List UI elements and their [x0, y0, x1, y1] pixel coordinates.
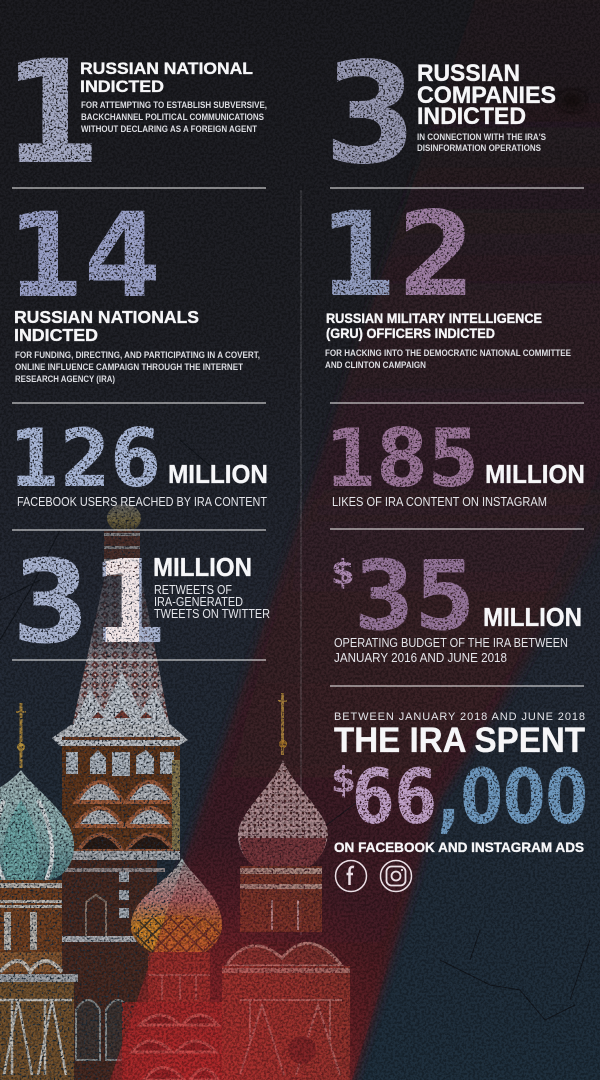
stat: IRA spent $66,000: $ [331, 760, 356, 801]
stat: 3 Russian companies [324, 33, 556, 196]
stat: 3 Russian companies: IN CONNECTION WITH THE IRA'S [417, 132, 546, 143]
stat: 12 GRU officers: (GRU) OFFICERS INDICTED [326, 325, 495, 341]
stat: 12 GRU officers: 12 [319, 186, 475, 323]
stat: 3 Russian companies: COMPANIES [417, 82, 556, 109]
stat: $35 million [331, 540, 582, 665]
stat: 14 Russian nationals: FOR FUNDING, DIRECTING, AND PARTICIPATING IN A COVERT, [15, 350, 260, 361]
stat: 14 Russian nationals: INDICTED [14, 325, 98, 345]
stat: 3 Russian companies: 3 [324, 33, 417, 196]
stat: 31 million: 31 [12, 536, 168, 670]
stat: 14 Russian nationals: ONLINE INFLUENCE CAMPAIGN THROUGH THE INTERNET [15, 362, 243, 373]
divider lines row 3 [12, 529, 584, 530]
divider lines row 2 [12, 402, 584, 404]
illustration: Saint Basil's Cathedral [0, 504, 350, 1080]
stat: 1 Russian national: FOR ATTEMPTING TO ESTABLISH SUBVERSIVE, [81, 100, 267, 111]
stat: 31 million: MILLION [153, 552, 252, 582]
stat: $35 million: 35 [354, 540, 475, 652]
stat: 31 million [20, 556, 270, 644]
divider lines [12, 660, 584, 686]
stat: 3 Russian companies: RUSSIAN [417, 60, 520, 87]
stat: 1 Russian national: RUSSIAN NATIONAL [80, 59, 253, 78]
stat: 31 million: IRA-GENERATED [154, 595, 243, 609]
right dome [222, 693, 350, 1080]
left dome [0, 703, 78, 1080]
stat: 126 million: FACEBOOK USERS REACHED BY IRA CONTENT [17, 495, 267, 509]
stat: 185 million: MILLION [485, 459, 585, 489]
stat: 31 million: 31 [12, 536, 168, 670]
icon: Facebook [336, 860, 366, 892]
stat: 126 million [9, 412, 268, 509]
divider lines row 1 [12, 187, 584, 189]
stat: $35 million: JANUARY 2016 AND JUNE 2018 [334, 651, 507, 665]
stat: 1 Russian national: BACKCHANNEL POLITICAL COMMUNICATIONS [81, 112, 264, 123]
stat: 185 million: 185 [325, 412, 479, 505]
stat: 1 Russian national: WITHOUT DECLARING AS A FOREIGN AGENT [81, 124, 257, 135]
red band overlay [110, 88, 589, 1080]
stat: 1 Russian national: 1 [2, 29, 102, 196]
central tower [52, 504, 188, 1080]
stat: 31 million: TWEETS ON TWITTER [154, 607, 270, 621]
stat: 12 GRU officers: AND CLINTON CAMPAIGN [325, 360, 426, 371]
stat: IRA spent $66,000: ON FACEBOOK AND INSTAGRAM ADS [334, 840, 584, 855]
stat: 1 Russian national: INDICTED [80, 77, 164, 96]
stat: 3 Russian companies: INDICTED [417, 103, 526, 130]
stat: 12 GRU officers [319, 186, 571, 371]
icon: Instagram [380, 860, 412, 892]
stat: IRA spent $66,000: THE IRA SPENT [334, 721, 585, 760]
stat: 14 Russian nationals [7, 187, 260, 385]
stat: 185 million: LIKES OF IRA CONTENT ON INSTAGRAM [332, 495, 547, 509]
stat: $35 million: $ [331, 553, 355, 593]
stat: 12 GRU officers: RUSSIAN MILITARY INTELLIGENCE [326, 310, 542, 326]
tower arches [76, 782, 174, 851]
stat: 14 Russian nationals: 14 [7, 187, 161, 324]
stat: IRA spent $66,000: BETWEEN JANUARY 2018 AND JUNE 2018 [334, 711, 585, 723]
stat: 126 million: 126 [9, 412, 161, 505]
stat: IRA spent $66,000 [331, 711, 588, 892]
stat: 14 Russian nationals: RUSSIAN NATIONALS [14, 307, 199, 327]
stat: 3 Russian companies: DISINFORMATION OPERATIONS [417, 143, 541, 154]
stat: 1 Russian national [2, 29, 267, 196]
middle dome [122, 858, 222, 1080]
stat: $35 million: OPERATING BUDGET OF THE IRA BETWEEN [334, 636, 568, 650]
stat: 185 million [325, 412, 585, 509]
stat: $35 million: MILLION [483, 602, 582, 632]
stat: 14 Russian nationals: RESEARCH AGENCY (IRA) [15, 374, 115, 385]
divider line: vertical [300, 190, 302, 935]
stat: 31 million: RETWEETS OF [154, 583, 232, 597]
stat: 126 million: MILLION [168, 459, 268, 489]
